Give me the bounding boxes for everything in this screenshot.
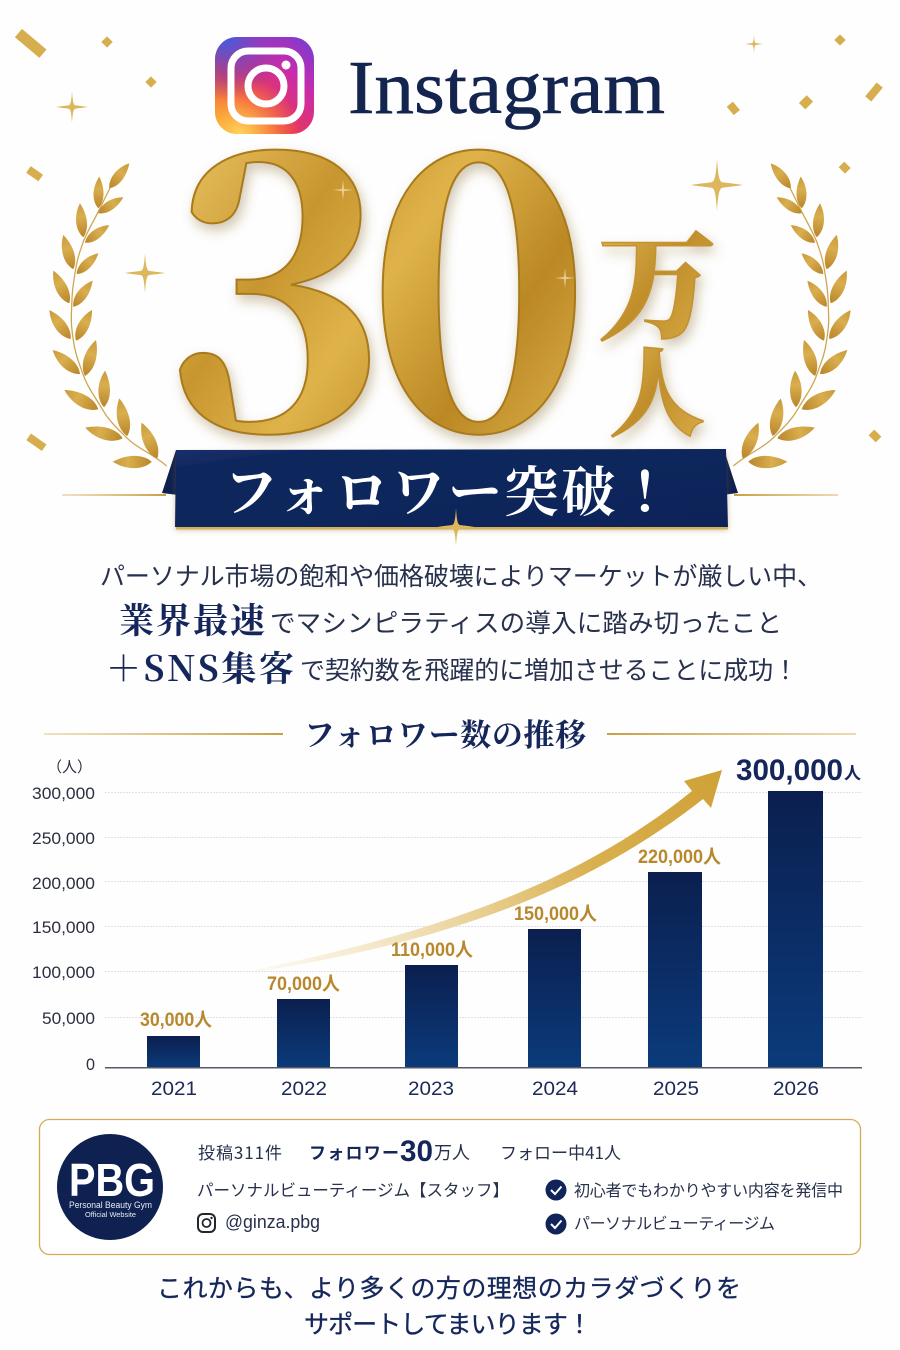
y axis labels: 300,000 bbox=[32, 784, 95, 803]
x axis years: 2026 bbox=[773, 1079, 819, 1100]
icon: PBG logo bbox=[57, 1134, 163, 1240]
gold rules beside banner bbox=[62, 494, 838, 496]
x axis years: 2023 bbox=[408, 1079, 454, 1100]
profile stats: 万人 bbox=[434, 1139, 470, 1165]
intro text block: パーソナル市場の飽和や価格破壊によりマーケットが厳しい中、 bbox=[100, 557, 822, 593]
y axis labels: 250,000 bbox=[32, 829, 95, 848]
intro text block: でマシンピラティスの導入に踏み切ったこと bbox=[270, 603, 782, 640]
value labels: 150,000人 bbox=[514, 904, 597, 925]
laurel wreath right bbox=[733, 160, 855, 468]
profile stats: フォロワー bbox=[309, 1144, 399, 1163]
y axis labels: 50,000 bbox=[42, 1009, 95, 1028]
value labels bbox=[140, 754, 861, 1031]
y axis labels: 0 bbox=[86, 1055, 95, 1074]
heading: Instagram wordmark: Instagram bbox=[348, 46, 665, 130]
icon: PBG logo: Personal Beauty Gym bbox=[69, 1200, 152, 1210]
intro text block bbox=[100, 557, 822, 692]
x axis years: 2024 bbox=[532, 1079, 578, 1100]
value labels: 110,000人 bbox=[391, 940, 473, 961]
x axis years: 2021 bbox=[151, 1079, 197, 1100]
icon: Instagram logo bbox=[215, 37, 314, 134]
headline number: 30万人: 人 bbox=[609, 319, 705, 456]
profile stats: 30 bbox=[400, 1135, 433, 1168]
bar chart bbox=[32, 754, 862, 1100]
y axis labels bbox=[32, 756, 95, 1074]
headline number: 30万人: 3 bbox=[165, 10, 388, 534]
banner text: フォロワー突破！ bbox=[224, 450, 672, 527]
checklist item 2: パーソナルビューティージム bbox=[574, 1210, 775, 1234]
headline number: 30万人: 0 bbox=[367, 10, 590, 534]
value labels: 300,000 bbox=[736, 754, 843, 787]
y axis labels: 100,000 bbox=[32, 963, 95, 982]
panel: profile card bbox=[40, 1120, 860, 1254]
growth arrow bbox=[255, 770, 722, 972]
checklist item 1: 初心者でもわかりやすい内容を発信中 bbox=[574, 1177, 843, 1201]
banner: follower breakthrough bbox=[162, 449, 738, 546]
headline number: 30万人: 万 bbox=[598, 194, 716, 364]
value labels: 人 bbox=[844, 764, 861, 783]
laurel wreath left bbox=[45, 160, 167, 468]
x axis years bbox=[151, 1079, 819, 1100]
section heading: follower trend: フォロワー数の推移 bbox=[304, 710, 586, 755]
profile stats: フォロー中41人 bbox=[500, 1139, 621, 1164]
profile stats: 投稿311件 bbox=[198, 1139, 282, 1164]
icon: PBG logo: Official Website bbox=[85, 1212, 136, 1219]
account handle: @ginza.pbg bbox=[225, 1212, 320, 1232]
confetti and sparkles bbox=[15, 29, 883, 451]
account name: パーソナルビューティージム【スタッフ】 bbox=[197, 1177, 509, 1201]
y axis labels: 150,000 bbox=[32, 918, 95, 937]
closing message: サポートしてまいります！ bbox=[304, 1305, 592, 1341]
icon: PBG logo: PBG bbox=[69, 1154, 155, 1206]
profile stats bbox=[198, 1135, 621, 1168]
x axis years: 2025 bbox=[653, 1079, 699, 1100]
intro text block: 業界最速 bbox=[119, 594, 266, 644]
intro text block: で契約数を飛躍的に増加させることに成功！ bbox=[300, 651, 798, 687]
closing message: これからも、より多くの方の理想のカラダづくりを bbox=[157, 1269, 741, 1305]
value labels: 30,000人 bbox=[140, 1010, 212, 1031]
y axis labels: （人） bbox=[47, 756, 92, 777]
intro text block: ＋SNS集客 bbox=[106, 642, 294, 692]
y axis labels: 200,000 bbox=[32, 874, 95, 893]
bars bbox=[147, 791, 823, 1068]
x axis years: 2022 bbox=[281, 1079, 327, 1100]
value labels: 220,000人 bbox=[638, 847, 721, 868]
gold glints on numerals bbox=[333, 180, 575, 288]
y axis grid bbox=[105, 792, 862, 1018]
headline number: 30万人 bbox=[165, 10, 716, 534]
closing message bbox=[157, 1269, 741, 1341]
value labels: 70,000人 bbox=[267, 974, 340, 995]
